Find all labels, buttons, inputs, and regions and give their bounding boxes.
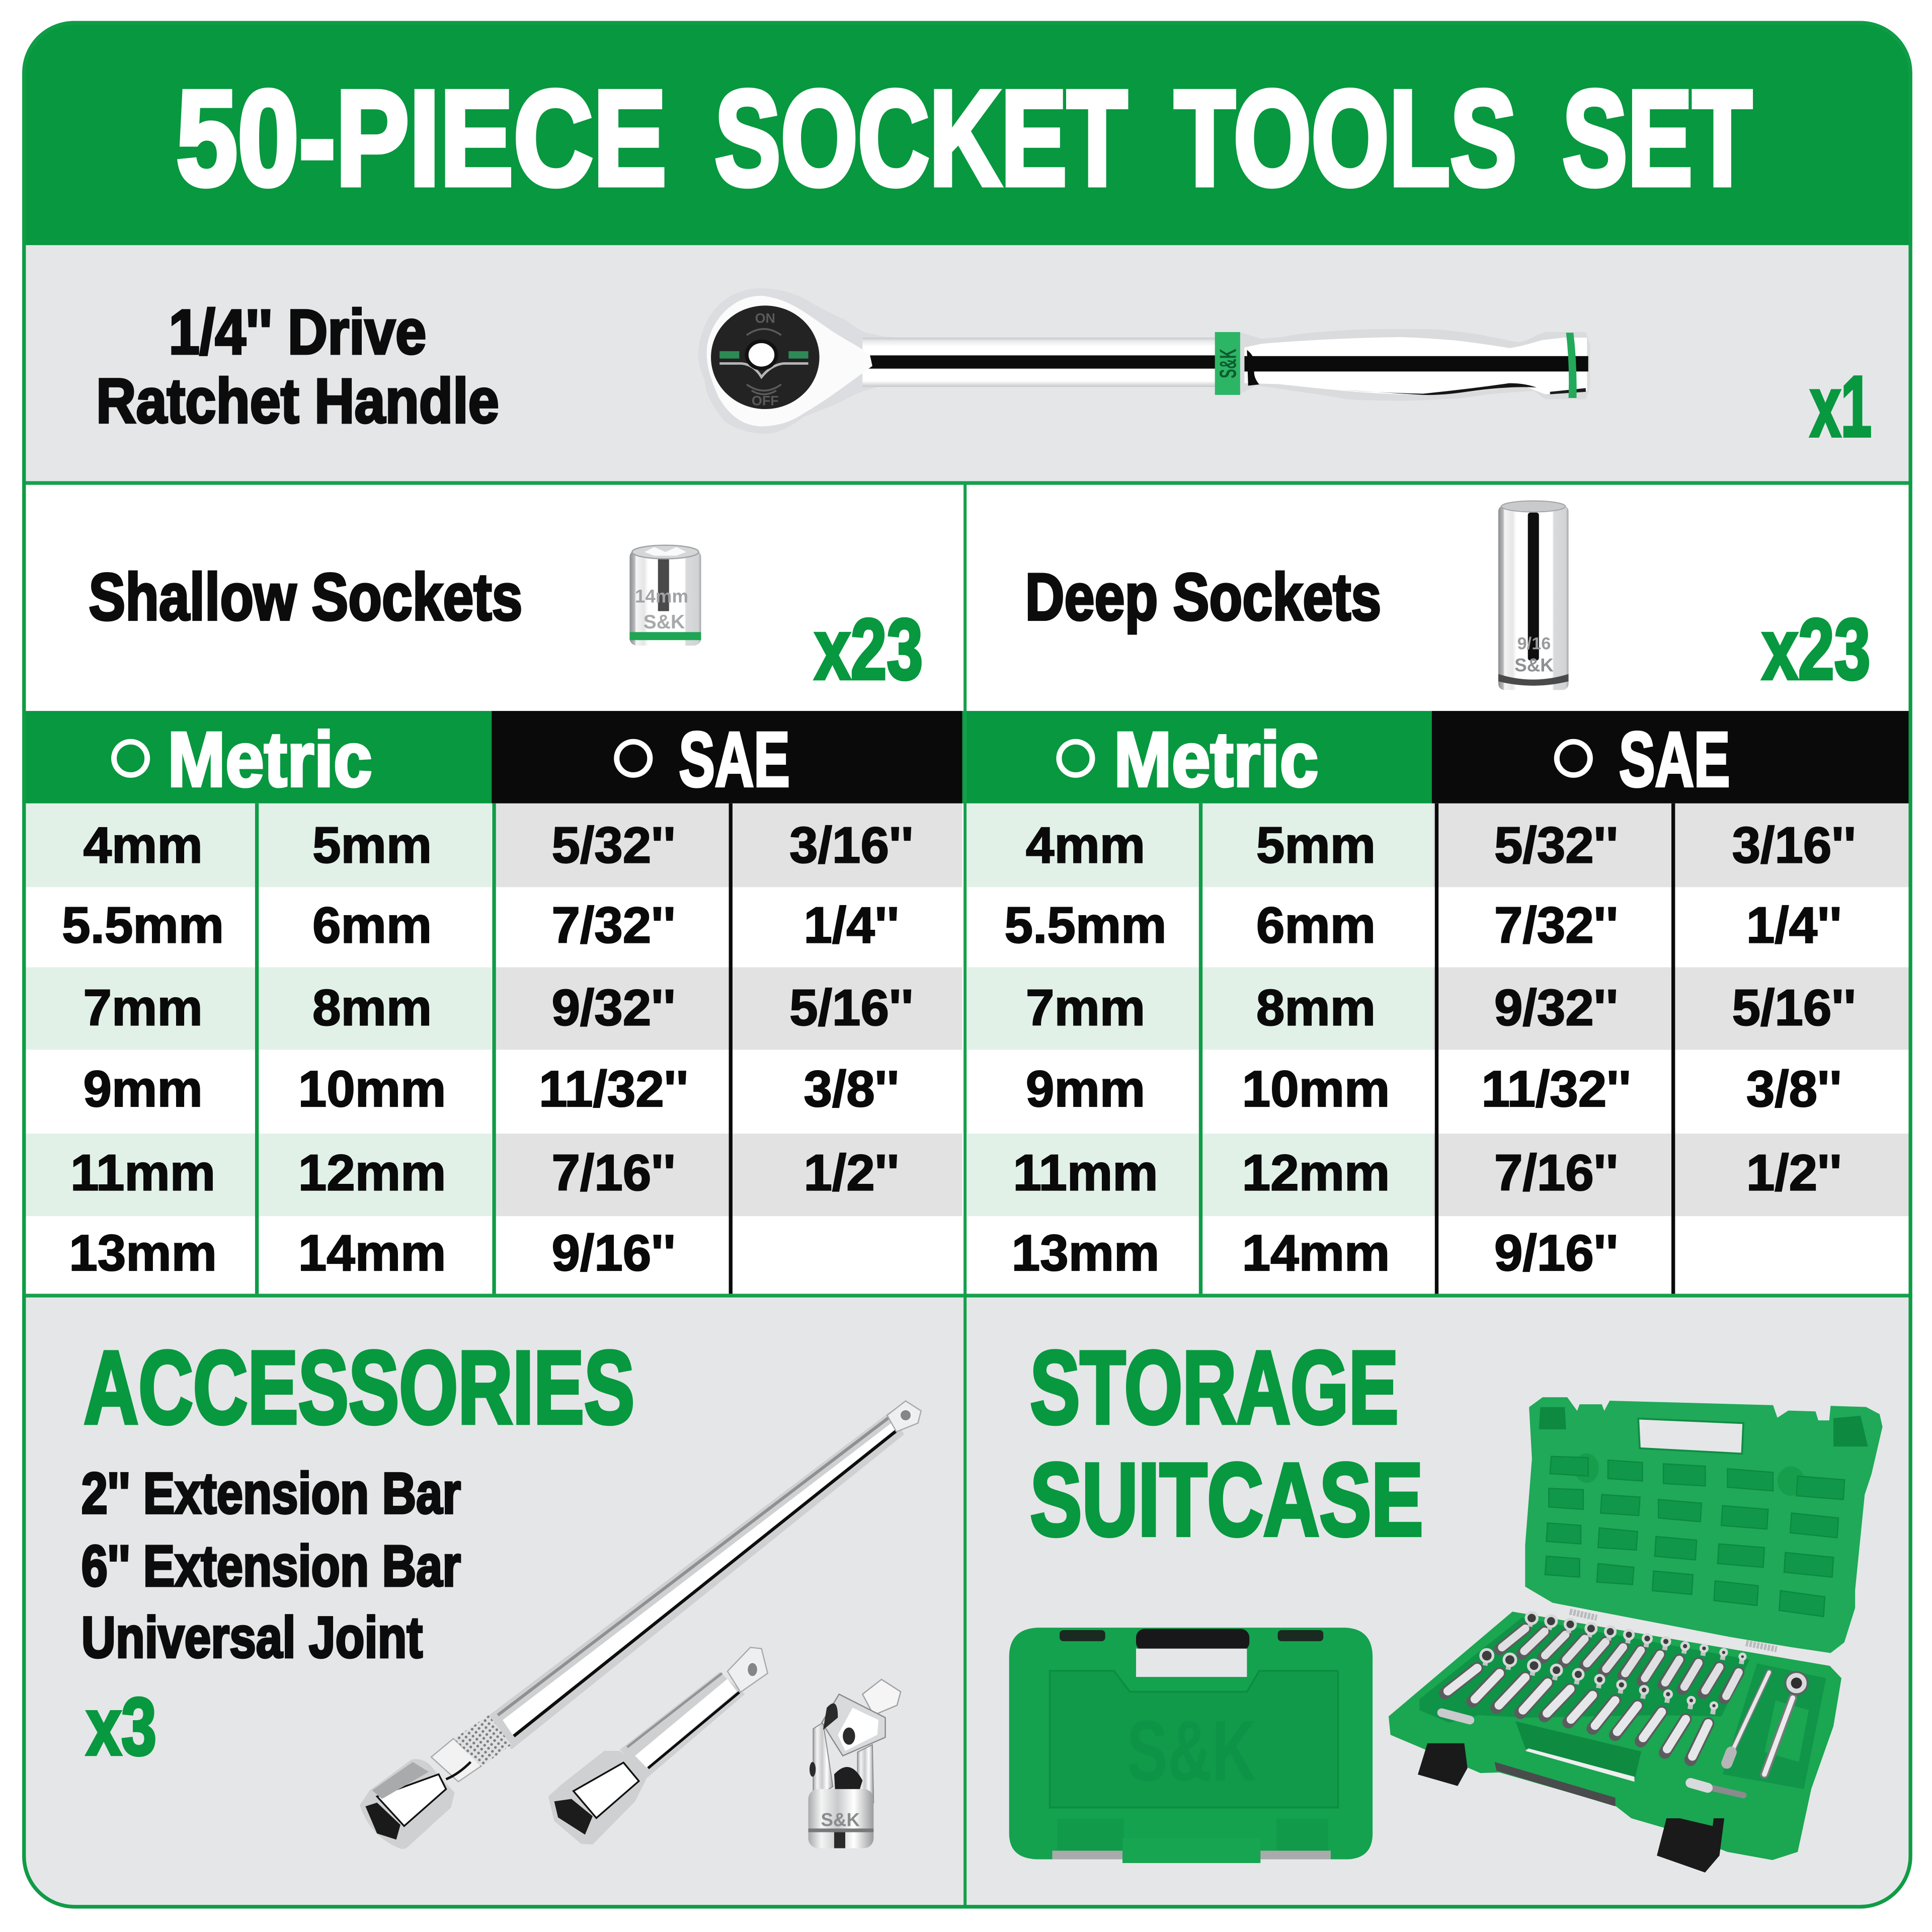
deep metric sizes: 10mm (1242, 1060, 1390, 1117)
icon: ratchet handle (698, 288, 1590, 434)
deep metric sizes: 13mm (1012, 1224, 1159, 1281)
deep metric sizes: 5mm (1256, 816, 1376, 873)
heading: accessories: ACCESSORIES (84, 1330, 634, 1445)
deep metric sizes (1005, 816, 1390, 1281)
deep metric sizes: 7mm (1026, 979, 1145, 1036)
shallow SAE sizes: 1/2'' (803, 1144, 899, 1201)
icon: shallow socket: 14mm (635, 586, 688, 607)
shallow metric sizes: 5mm (312, 816, 432, 873)
quantity: x23: x23 (1762, 601, 1871, 697)
header: metric (deep) (962, 711, 1432, 803)
shallow SAE sizes: 9/32'' (552, 979, 676, 1036)
header: SAE (shallow): SAE (679, 715, 790, 802)
header: SAE (shallow) (492, 711, 962, 803)
shallow SAE sizes: 3/16'' (789, 816, 913, 873)
small sockets in case (1481, 1613, 1745, 1714)
accessories list: 2'' Extension Bar (82, 1461, 461, 1525)
heading: ratchet handle: 1/4'' Drive (169, 297, 426, 367)
panel: size tables (25, 711, 1910, 1281)
deep metric sizes: 14mm (1242, 1224, 1390, 1281)
shallow metric sizes: 13mm (69, 1224, 217, 1281)
shallow metric sizes: 7mm (83, 979, 203, 1036)
shallow metric sizes: 4mm (83, 816, 203, 873)
shallow SAE sizes: 7/16'' (552, 1144, 676, 1201)
deep metric sizes: 9mm (1026, 1060, 1145, 1117)
deep SAE sizes: 7/32'' (1494, 896, 1618, 953)
accessories list: 6'' Extension Bar (82, 1534, 461, 1598)
deep SAE sizes: 11/32'' (1482, 1060, 1631, 1117)
suitcase lid (1525, 1397, 1883, 1653)
panel: storage suitcase (1009, 1330, 1883, 1873)
panel: accessories (82, 1330, 921, 1849)
heading: ratchet handle: Ratchet Handle (96, 366, 499, 436)
deep SAE sizes: 1/4'' (1746, 896, 1842, 953)
deep SAE sizes: 9/16'' (1494, 1224, 1618, 1281)
shallow metric sizes: 10mm (298, 1060, 446, 1117)
shallow metric sizes: 14mm (298, 1224, 446, 1281)
shallow SAE sizes: 7/32'' (552, 896, 676, 953)
shallow SAE sizes: 11/32'' (539, 1060, 688, 1117)
deep SAE sizes (1482, 816, 1856, 1281)
panel: shallow sockets (89, 545, 923, 697)
title: TOOLS (1174, 62, 1517, 214)
icon: deep socket: 9/16 (1517, 634, 1551, 654)
title: SET (1562, 62, 1752, 214)
deep SAE sizes: 5/16'' (1732, 979, 1856, 1036)
accessories list: Universal Joint (82, 1605, 423, 1670)
header: metric (shallow) (25, 711, 492, 803)
tools in case (1441, 1672, 1808, 1795)
icon: 2 inch extension bar (548, 1647, 768, 1844)
deep SAE sizes: 5/32'' (1494, 816, 1618, 873)
deep metric sizes: 5.5mm (1005, 896, 1167, 953)
heading: storage suitcase (1030, 1330, 1423, 1557)
icon: universal joint (809, 1679, 901, 1848)
panel: deep sockets (1025, 501, 1871, 697)
shallow SAE sizes: 9/16'' (552, 1224, 676, 1281)
shallow SAE sizes: 1/4'' (803, 896, 899, 953)
shallow metric sizes: 11mm (70, 1144, 215, 1201)
shallow metric sizes (62, 816, 446, 1281)
shallow metric sizes: 5.5mm (62, 896, 224, 953)
row backgrounds (25, 803, 1910, 1216)
icon: universal joint: S&K (821, 1809, 860, 1830)
header: SAE (deep): SAE (1619, 715, 1730, 802)
header: SAE (deep) (1432, 711, 1910, 803)
icon: open suitcase (1389, 1397, 1883, 1873)
icon: 6 inch extension bar (360, 1401, 921, 1849)
heading: storage suitcase: SUITCASE (1030, 1441, 1423, 1557)
title: 50-PIECE (176, 62, 667, 214)
deep metric sizes: 12mm (1242, 1144, 1390, 1201)
shallow SAE sizes: 5/32'' (552, 816, 676, 873)
deep metric sizes: 11mm (1013, 1144, 1158, 1201)
heading: ratchet handle (96, 297, 499, 436)
heading: deep sockets: Deep Sockets (1025, 560, 1381, 634)
deep SAE sizes: 1/2'' (1746, 1144, 1842, 1201)
quantity: x3: x3 (86, 1681, 156, 1772)
shallow metric sizes: 6mm (312, 896, 432, 953)
icon: closed suitcase: S&K (1127, 1703, 1256, 1799)
deep sockets in case (1445, 1629, 1739, 1760)
icon: closed suitcase (1009, 1628, 1373, 1863)
deep metric sizes: 6mm (1256, 896, 1376, 953)
deep metric sizes: 4mm (1026, 816, 1145, 873)
shallow SAE sizes: 3/8'' (803, 1060, 899, 1117)
header: metric (deep): Metric (1114, 715, 1318, 802)
deep SAE sizes: 9/32'' (1494, 979, 1618, 1036)
shallow metric sizes: 12mm (298, 1144, 446, 1201)
heading: storage suitcase: STORAGE (1030, 1330, 1399, 1445)
icon: ratchet handle: S&K (1215, 349, 1241, 378)
icon: ratchet handle: ON (755, 311, 775, 326)
latches (1418, 1743, 1468, 1786)
accessories list (82, 1461, 461, 1670)
shallow metric sizes: 8mm (312, 979, 432, 1036)
quantity: x1: x1 (1810, 359, 1872, 455)
shallow metric sizes: 9mm (83, 1060, 203, 1117)
shallow SAE sizes (539, 816, 913, 1281)
deep SAE sizes: 3/8'' (1746, 1060, 1842, 1117)
icon: shallow socket: S&K (643, 611, 685, 633)
deep SAE sizes: 3/16'' (1732, 816, 1856, 873)
panel: ratchet handle (96, 288, 1872, 455)
shallow SAE sizes: 5/16'' (789, 979, 913, 1036)
header: metric (shallow): Metric (168, 715, 372, 802)
icon: shallow socket (629, 545, 701, 646)
heading: shallow sockets: Shallow Sockets (89, 560, 522, 634)
icon: deep socket (1498, 501, 1569, 690)
deep metric sizes: 8mm (1256, 979, 1376, 1036)
icon: deep socket: S&K (1514, 655, 1554, 676)
title (176, 62, 1752, 214)
quantity: x23: x23 (815, 601, 923, 697)
deep SAE sizes: 7/16'' (1494, 1144, 1618, 1201)
lid pockets (1545, 1457, 1844, 1617)
title: SOCKET (714, 62, 1128, 214)
icon: ratchet handle: OFF (752, 393, 779, 409)
suitcase base (1389, 1612, 1841, 1860)
